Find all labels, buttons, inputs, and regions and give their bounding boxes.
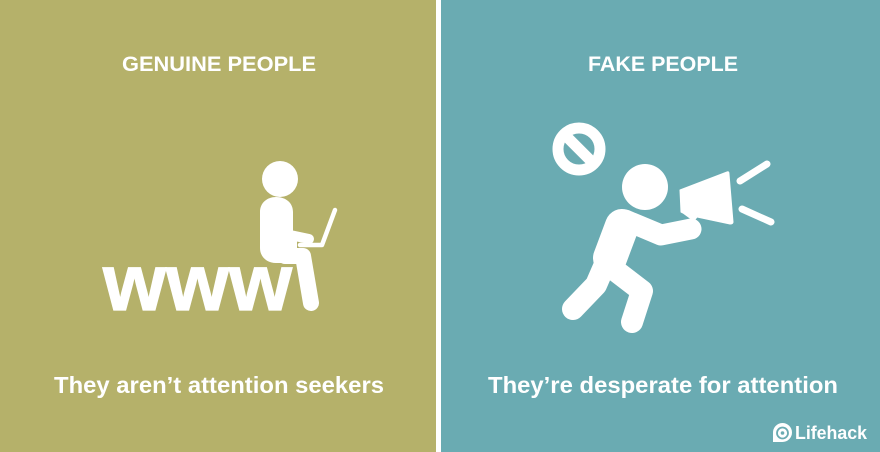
- caption: fake people: They’re desperate for attention: [488, 372, 838, 398]
- icon: person shouting into megaphone: [573, 164, 771, 322]
- panel: genuine people: [0, 0, 436, 452]
- sound lines: [740, 164, 771, 222]
- caption: genuine people: They aren’t attention seekers: [54, 372, 384, 398]
- leg: [285, 256, 311, 303]
- arm: [290, 235, 309, 239]
- megaphone: [680, 172, 733, 224]
- www word: www: [102, 238, 293, 327]
- back leg: [573, 262, 606, 309]
- torso: [610, 226, 622, 258]
- laptop: [300, 210, 335, 245]
- heading: genuine people: GENUINE PEOPLE: [122, 53, 316, 76]
- logo: Lifehack: Lifehack: [795, 423, 868, 443]
- arm: [625, 220, 691, 235]
- heading: fake people: FAKE PEOPLE: [588, 53, 738, 76]
- icon: person with laptop sitting on www: [102, 161, 335, 327]
- panel: fake people: [441, 0, 880, 452]
- head: [262, 161, 298, 197]
- head: [622, 164, 668, 210]
- torso: [260, 197, 297, 263]
- icon: prohibited sign: [558, 128, 600, 170]
- front leg: [612, 268, 642, 322]
